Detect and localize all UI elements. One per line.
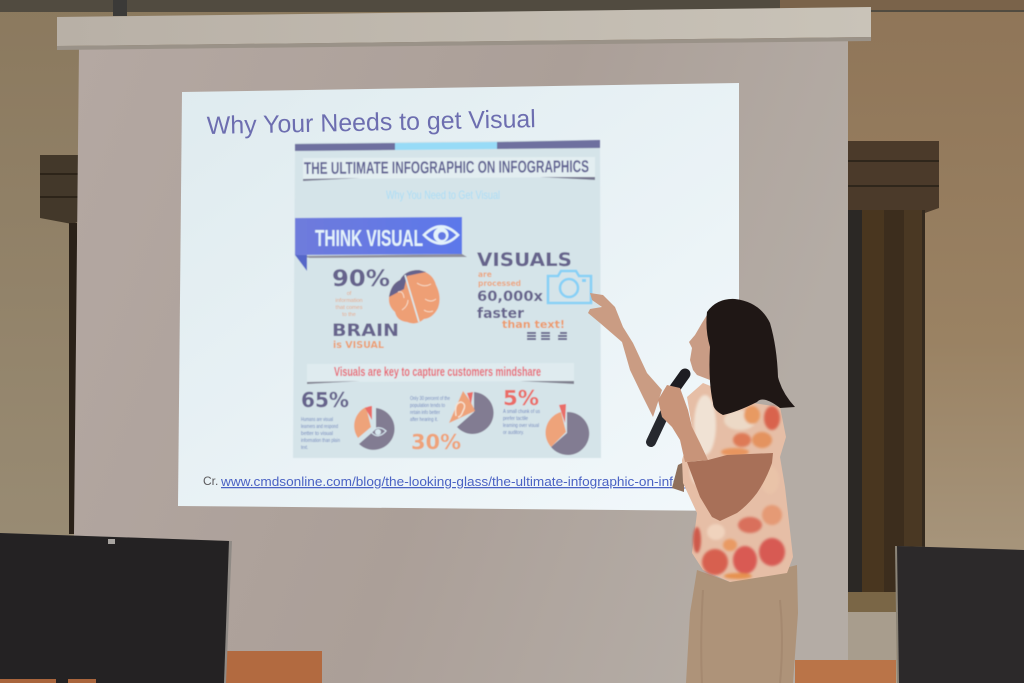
screen housing	[57, 7, 871, 50]
90 percent brain stat: to the	[342, 312, 356, 318]
icon: camera	[548, 271, 591, 303]
infographic subtitle: Why You Need to Get Visual	[386, 188, 500, 202]
face	[689, 315, 713, 380]
visuals stat	[477, 249, 572, 340]
30 percent stat: after hearing it.	[410, 417, 438, 423]
30 percent stat: population tends to	[410, 403, 445, 409]
5 percent stat: 5%	[503, 386, 539, 410]
90 percent brain stat: that comes	[336, 305, 363, 311]
wood cabinets	[226, 651, 896, 683]
65 percent stat: 65%	[301, 388, 349, 412]
presenter	[588, 293, 798, 683]
slide title: Why Your Needs to get Visual	[207, 105, 536, 140]
projection screen	[74, 38, 848, 683]
visuals stat: faster	[477, 306, 524, 322]
skirt	[686, 565, 798, 683]
blouse	[682, 383, 793, 582]
infographic panel	[293, 140, 601, 458]
65 percent stat: information than plain	[301, 438, 340, 444]
visuals stat: VISUALS	[477, 249, 572, 271]
visuals stat: processed	[478, 279, 521, 288]
pie chart: 5 percent	[546, 404, 589, 455]
90 percent brain stat: BRAIN	[332, 321, 399, 341]
left monitor	[0, 533, 232, 683]
mindshare callout	[307, 363, 574, 384]
5 percent stat: prefer tactile	[503, 416, 528, 422]
microphone	[651, 374, 685, 442]
lower arm	[687, 453, 773, 521]
visuals stat: are	[478, 270, 492, 279]
infographic title	[303, 157, 595, 181]
projected slide	[178, 83, 739, 511]
30 percent stat: retain info better	[410, 410, 440, 416]
visuals stat: than text!	[502, 318, 565, 331]
think visual banner	[295, 217, 467, 271]
icon: text lines	[527, 332, 567, 340]
right curtain	[848, 141, 939, 612]
hair	[706, 299, 795, 415]
hand and forearm	[658, 385, 708, 462]
5 percent stat: or auditory.	[503, 430, 524, 436]
90 percent brain stat: of	[347, 291, 352, 297]
5 percent stat: learning over visual	[503, 423, 539, 429]
pie chart: 65 percent	[354, 406, 395, 450]
icon: brain	[389, 270, 440, 323]
source credit: Cr.	[203, 474, 218, 488]
30 percent stat: 30%	[411, 430, 461, 454]
65 percent stat: better to visual	[301, 431, 333, 437]
header colour bars	[295, 140, 600, 151]
right monitor	[895, 546, 1024, 683]
65 percent stat: Humans are visual	[301, 417, 333, 423]
paper tag	[672, 462, 684, 492]
30 percent stat: Only 30 percent of the	[410, 396, 450, 402]
65 percent stat: text.	[301, 445, 308, 451]
90 percent brain stat	[332, 267, 399, 351]
5 percent stat	[503, 386, 589, 455]
think visual banner: THINK VISUAL	[315, 225, 423, 251]
90 percent brain stat: 90%	[332, 267, 390, 292]
left curtain	[40, 155, 78, 534]
65 percent stat: learners and respond	[301, 424, 338, 430]
65 percent stat	[301, 388, 395, 451]
30 percent stat	[410, 391, 494, 454]
visuals stat: 60,000x	[477, 289, 543, 305]
source credit: www.cmdsonline.com/blog/the-looking-glass/the-ultimate-infographic-on-infographics	[220, 475, 732, 489]
pie chart: 30 percent	[449, 391, 494, 434]
90 percent brain stat: is VISUAL	[333, 340, 384, 351]
5 percent stat: A small chunk of us	[503, 409, 540, 415]
infographic title: THE ULTIMATE INFOGRAPHIC ON INFOGRAPHICS	[304, 157, 589, 178]
icon: eye	[424, 226, 458, 244]
mindshare callout: Visuals are key to capture customers mindshare	[334, 364, 541, 379]
90 percent brain stat: information	[335, 298, 363, 304]
raised arm	[588, 293, 662, 417]
